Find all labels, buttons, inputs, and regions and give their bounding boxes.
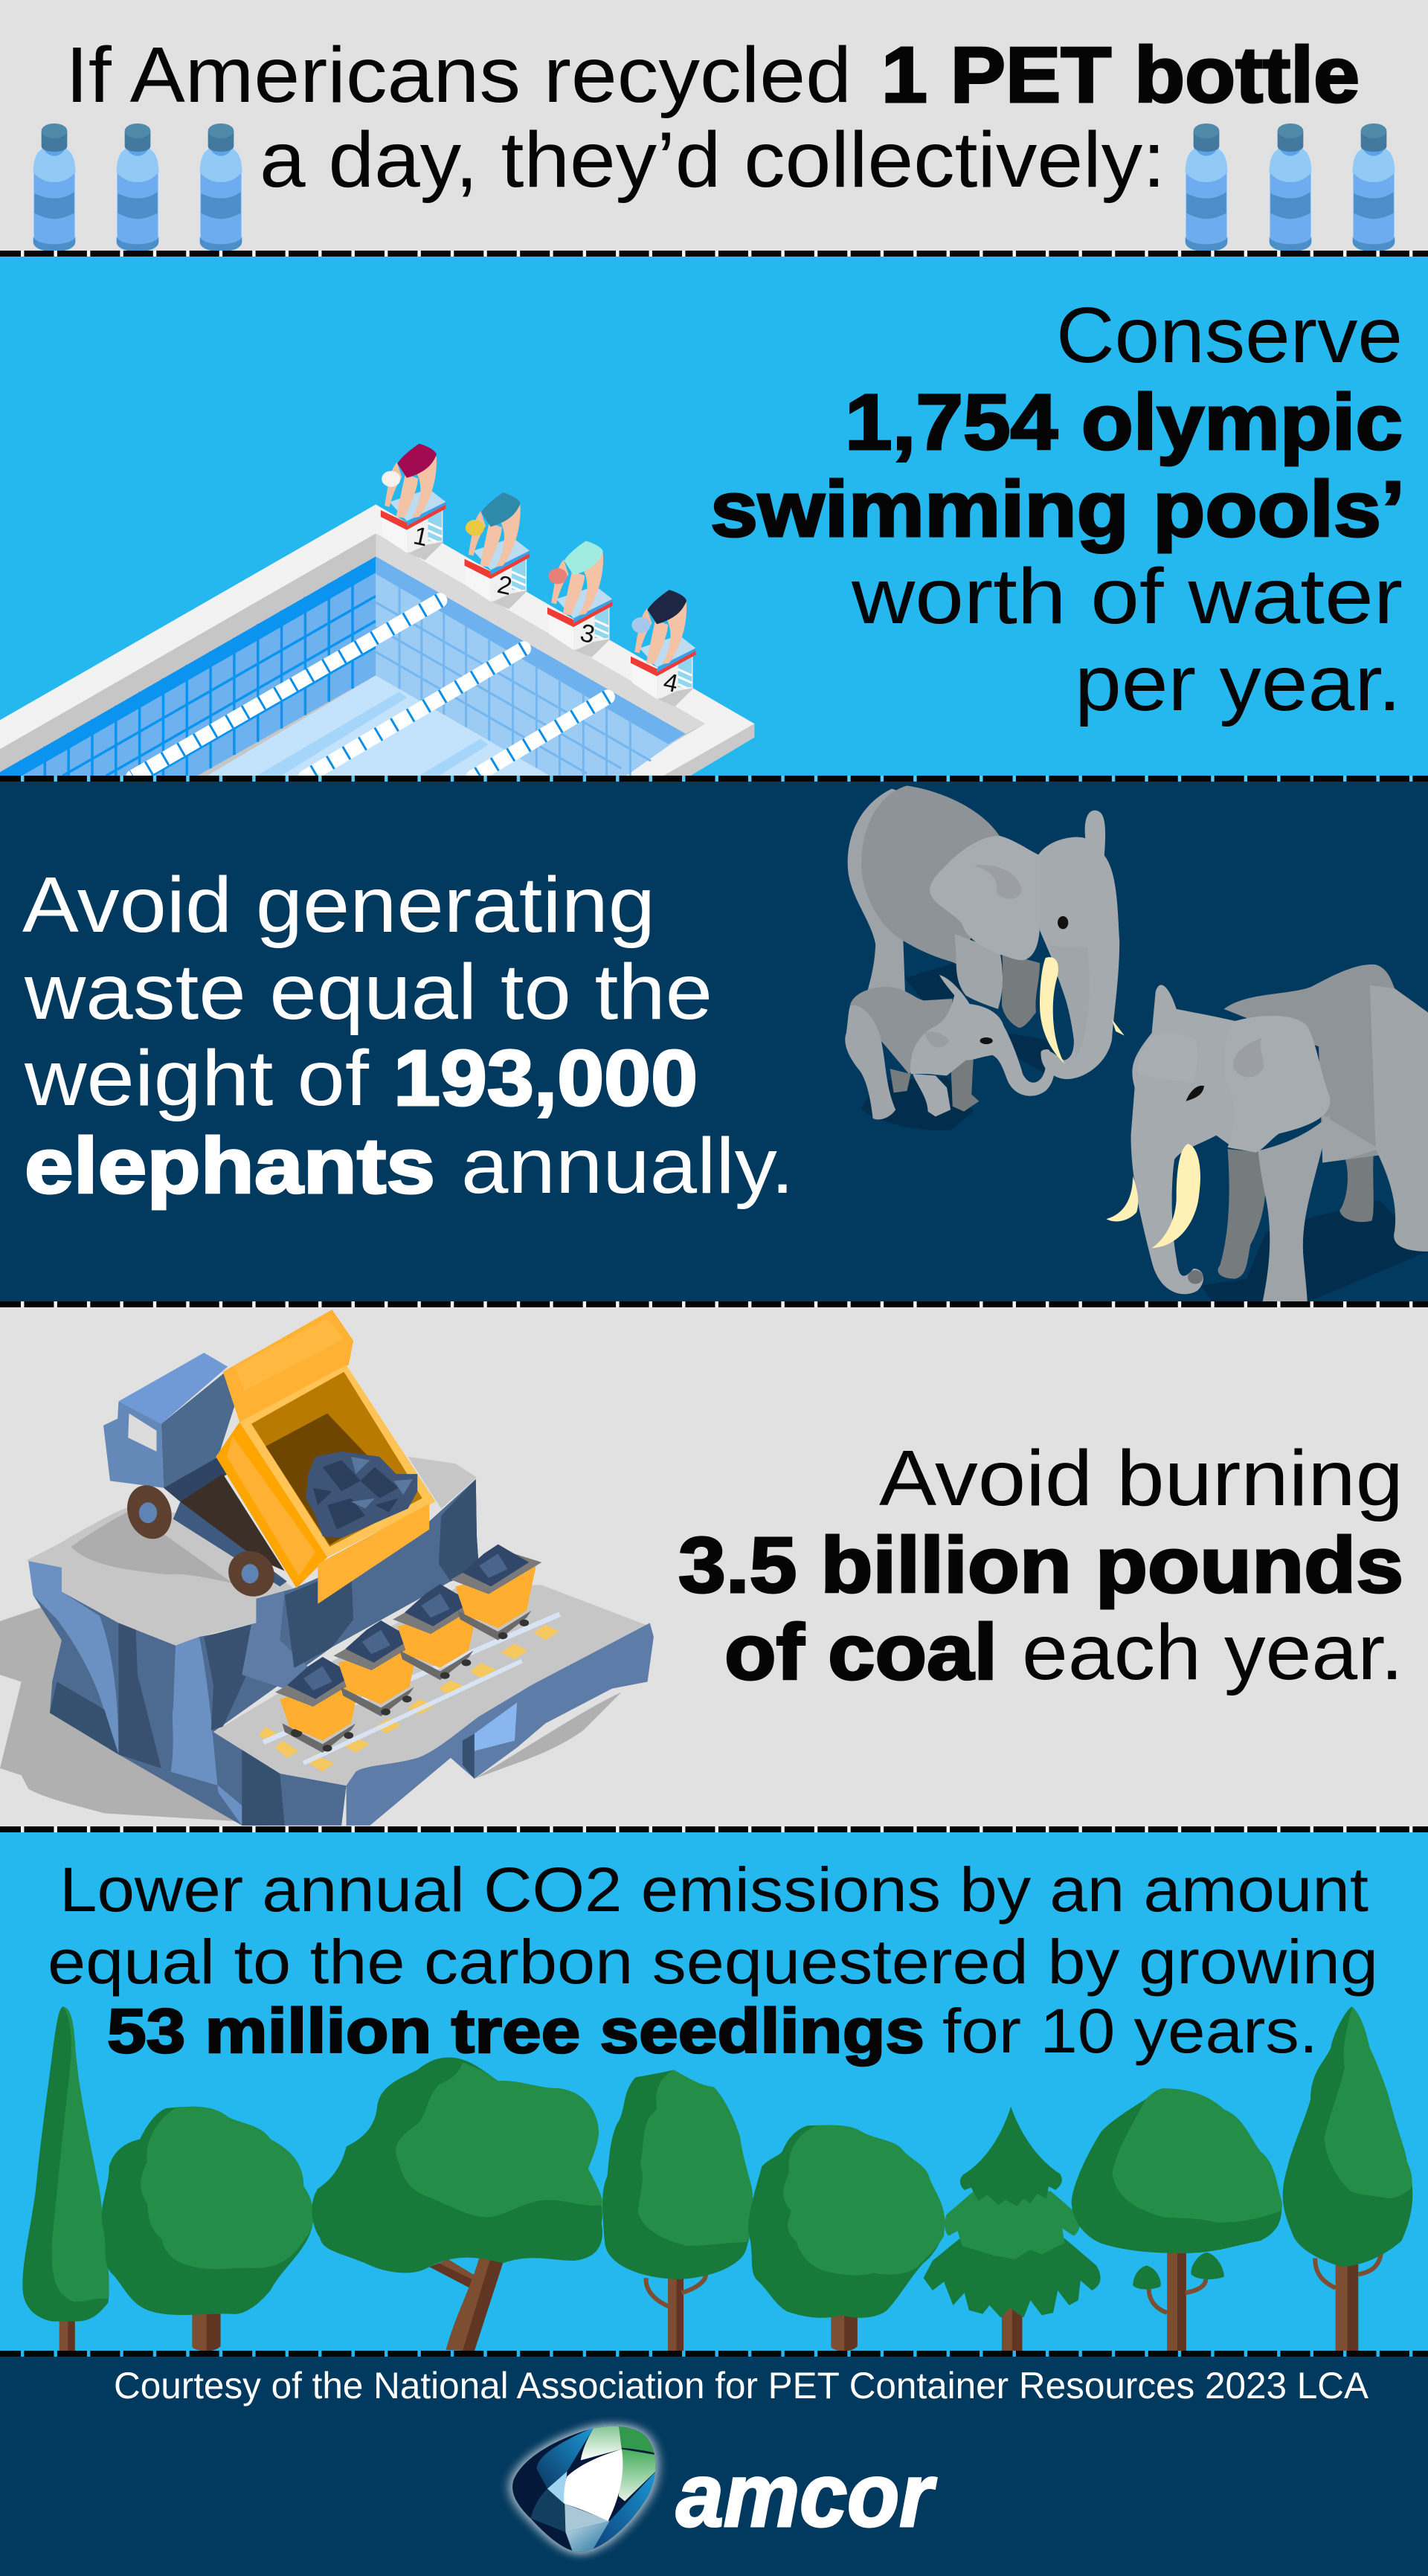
tree 8 xyxy=(1283,2006,1412,2351)
tree 2 xyxy=(102,2107,313,2351)
text: conserve water: 1,754 olympic xyxy=(845,379,1403,466)
panel: trees xyxy=(0,1829,1428,2354)
rail platform xyxy=(213,1585,650,1786)
text: lower co2: for 10 years. xyxy=(942,1996,1318,2066)
text: avoid waste: waste equal to the xyxy=(24,948,713,1036)
divider: dashed line 4 xyxy=(0,1826,1428,1832)
logo: amcor xyxy=(506,2422,937,2556)
panel: header xyxy=(0,0,1428,254)
adult elephant xyxy=(1106,965,1428,1302)
cliff xyxy=(28,1479,479,1826)
mother elephant xyxy=(848,786,1125,1079)
swimmer 3: 3 xyxy=(578,619,597,649)
text: avoid waste: elephants xyxy=(25,1122,435,1210)
text: conserve water: per year. xyxy=(1075,640,1401,727)
heading: line 1 xyxy=(65,31,1360,119)
text: avoid waste: Avoid generating xyxy=(22,861,655,949)
baby elephant xyxy=(845,975,1055,1120)
left wall tiles xyxy=(0,556,376,776)
text: lower co2: equal to the carbon sequestered by growing xyxy=(48,1927,1378,1997)
illustration: trees, right group xyxy=(748,2006,1412,2351)
panel: waste xyxy=(0,779,1428,1304)
heading: line 1: 1 PET bottle xyxy=(881,31,1360,119)
tree 7 xyxy=(1072,2088,1282,2351)
dump bed xyxy=(216,1310,436,1604)
text: conserve water: Conserve xyxy=(1056,292,1403,379)
panel: coal xyxy=(0,1304,1428,1829)
swimmer 2: 2 xyxy=(495,570,515,601)
mine carts xyxy=(275,1545,541,1753)
swimmer 1 xyxy=(381,444,446,560)
tree 4 xyxy=(602,2070,753,2351)
text: source credit: Courtesy of the National Association for PET Container Resources 2023 LCA xyxy=(114,2365,1369,2406)
divider: dashed line 3 xyxy=(0,1301,1428,1307)
divider: dashed line 1 xyxy=(0,251,1428,257)
text: conserve water xyxy=(710,292,1405,727)
tree 5 xyxy=(748,2125,945,2351)
icon: right bottles xyxy=(1186,123,1395,251)
heading: line 1: If Americans recycled xyxy=(65,31,852,119)
right wall tiles xyxy=(376,556,686,776)
plateau xyxy=(26,1505,294,1646)
truck xyxy=(103,1353,287,1599)
illustration: elephants xyxy=(845,786,1428,1302)
text: avoid waste: annually. xyxy=(461,1122,794,1210)
swimmer 1: 1 xyxy=(411,521,431,552)
illustration: trees, left group xyxy=(22,2006,753,2351)
rail track xyxy=(259,1614,560,1772)
text: avoid coal xyxy=(678,1434,1403,1696)
text: avoid coal: of coal xyxy=(724,1609,997,1696)
text: avoid coal: each year. xyxy=(1022,1609,1403,1696)
illustration: swimming pool xyxy=(0,444,754,777)
swimmer 3 xyxy=(547,541,612,657)
tree 6: pine xyxy=(924,2107,1101,2351)
text: lower co2: 53 million tree seedlings xyxy=(107,1996,924,2066)
panel: water xyxy=(0,254,1428,779)
logo mark xyxy=(506,2422,664,2556)
text: avoid coal: 3.5 billion pounds xyxy=(678,1522,1403,1609)
text: avoid waste: weight of xyxy=(24,1034,370,1122)
pool deck xyxy=(0,504,754,776)
ground shadows xyxy=(861,963,1057,1130)
icon: left bottles xyxy=(33,123,242,251)
illustration: coal mine xyxy=(0,1310,654,1826)
panel: footer xyxy=(0,2354,1428,2576)
text: avoid coal: Avoid burning xyxy=(879,1434,1403,1522)
ground shadow xyxy=(0,1602,309,1826)
text: conserve water: worth of water xyxy=(851,553,1403,640)
text: conserve water: swimming pools’ xyxy=(710,466,1405,553)
logo wordmark: amcor xyxy=(676,2444,937,2546)
swimmer 4 xyxy=(631,590,695,706)
swimmer 2 xyxy=(465,492,530,609)
text: lower co2: Lower annual CO2 emissions by an amount xyxy=(60,1855,1368,1925)
pool floor xyxy=(207,675,550,776)
divider: dashed line 5 xyxy=(0,2351,1428,2357)
text: avoid waste xyxy=(22,861,794,1210)
text: avoid waste: 193,000 xyxy=(393,1034,698,1122)
divider: dashed line 2 xyxy=(0,776,1428,782)
tree 3 xyxy=(312,2058,602,2351)
swimmer 4: 4 xyxy=(661,668,681,698)
tree 1 xyxy=(22,2006,109,2351)
lane ropes xyxy=(133,600,608,777)
text: lower co2 xyxy=(48,1855,1378,2066)
heading: line 2: a day, they’d collectively: xyxy=(260,116,1165,204)
